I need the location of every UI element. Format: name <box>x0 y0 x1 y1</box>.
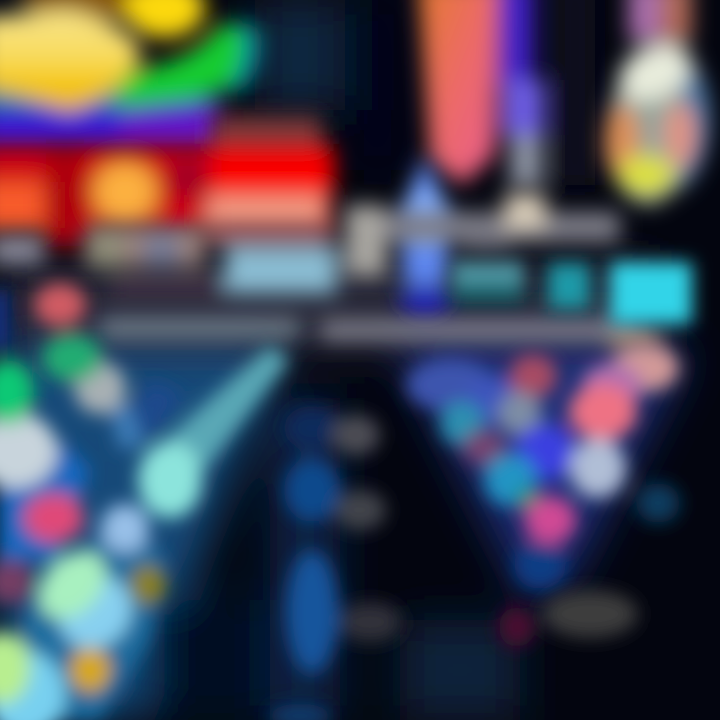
rainbow sun illustration <box>0 0 262 150</box>
colourful ribbon columns <box>418 0 595 187</box>
teal tiles <box>452 262 692 324</box>
blue centre marker <box>399 155 451 318</box>
blurred heading text rows <box>0 193 660 350</box>
right diagonal cards <box>406 344 680 589</box>
lower centre column <box>268 406 638 720</box>
left diagonal cards <box>0 283 290 720</box>
right oval emblem <box>604 0 710 205</box>
red banner <box>0 116 334 246</box>
